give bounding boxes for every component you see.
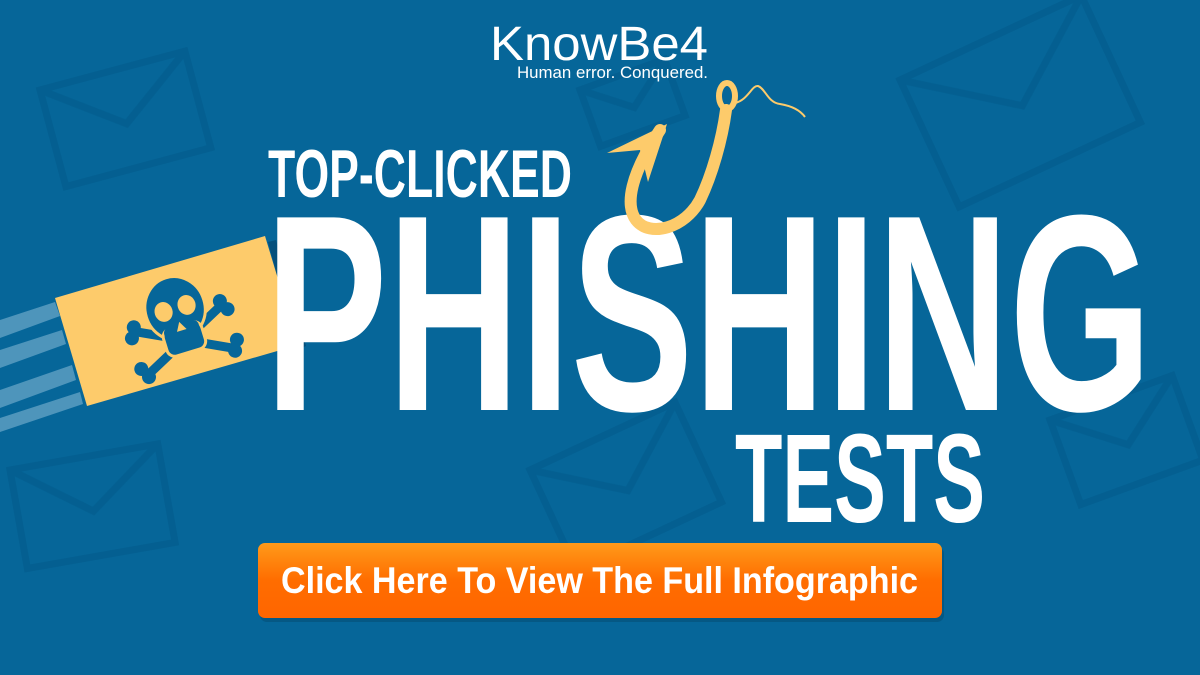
heading: TESTS: TESTS bbox=[735, 408, 985, 549]
button bbox=[258, 543, 944, 622]
icon: skull bbox=[111, 261, 249, 387]
icon: skull card bbox=[55, 236, 306, 406]
icon: fish hook bbox=[607, 83, 805, 229]
speed lines bbox=[0, 302, 83, 432]
logo: Human error. Conquered. bbox=[517, 63, 708, 82]
heading: TOP-CLICKED: TOP-CLICKED bbox=[268, 136, 572, 212]
button: Click Here To View The Full Infographic bbox=[281, 560, 918, 601]
logo: KnowBe4 bbox=[490, 18, 708, 71]
